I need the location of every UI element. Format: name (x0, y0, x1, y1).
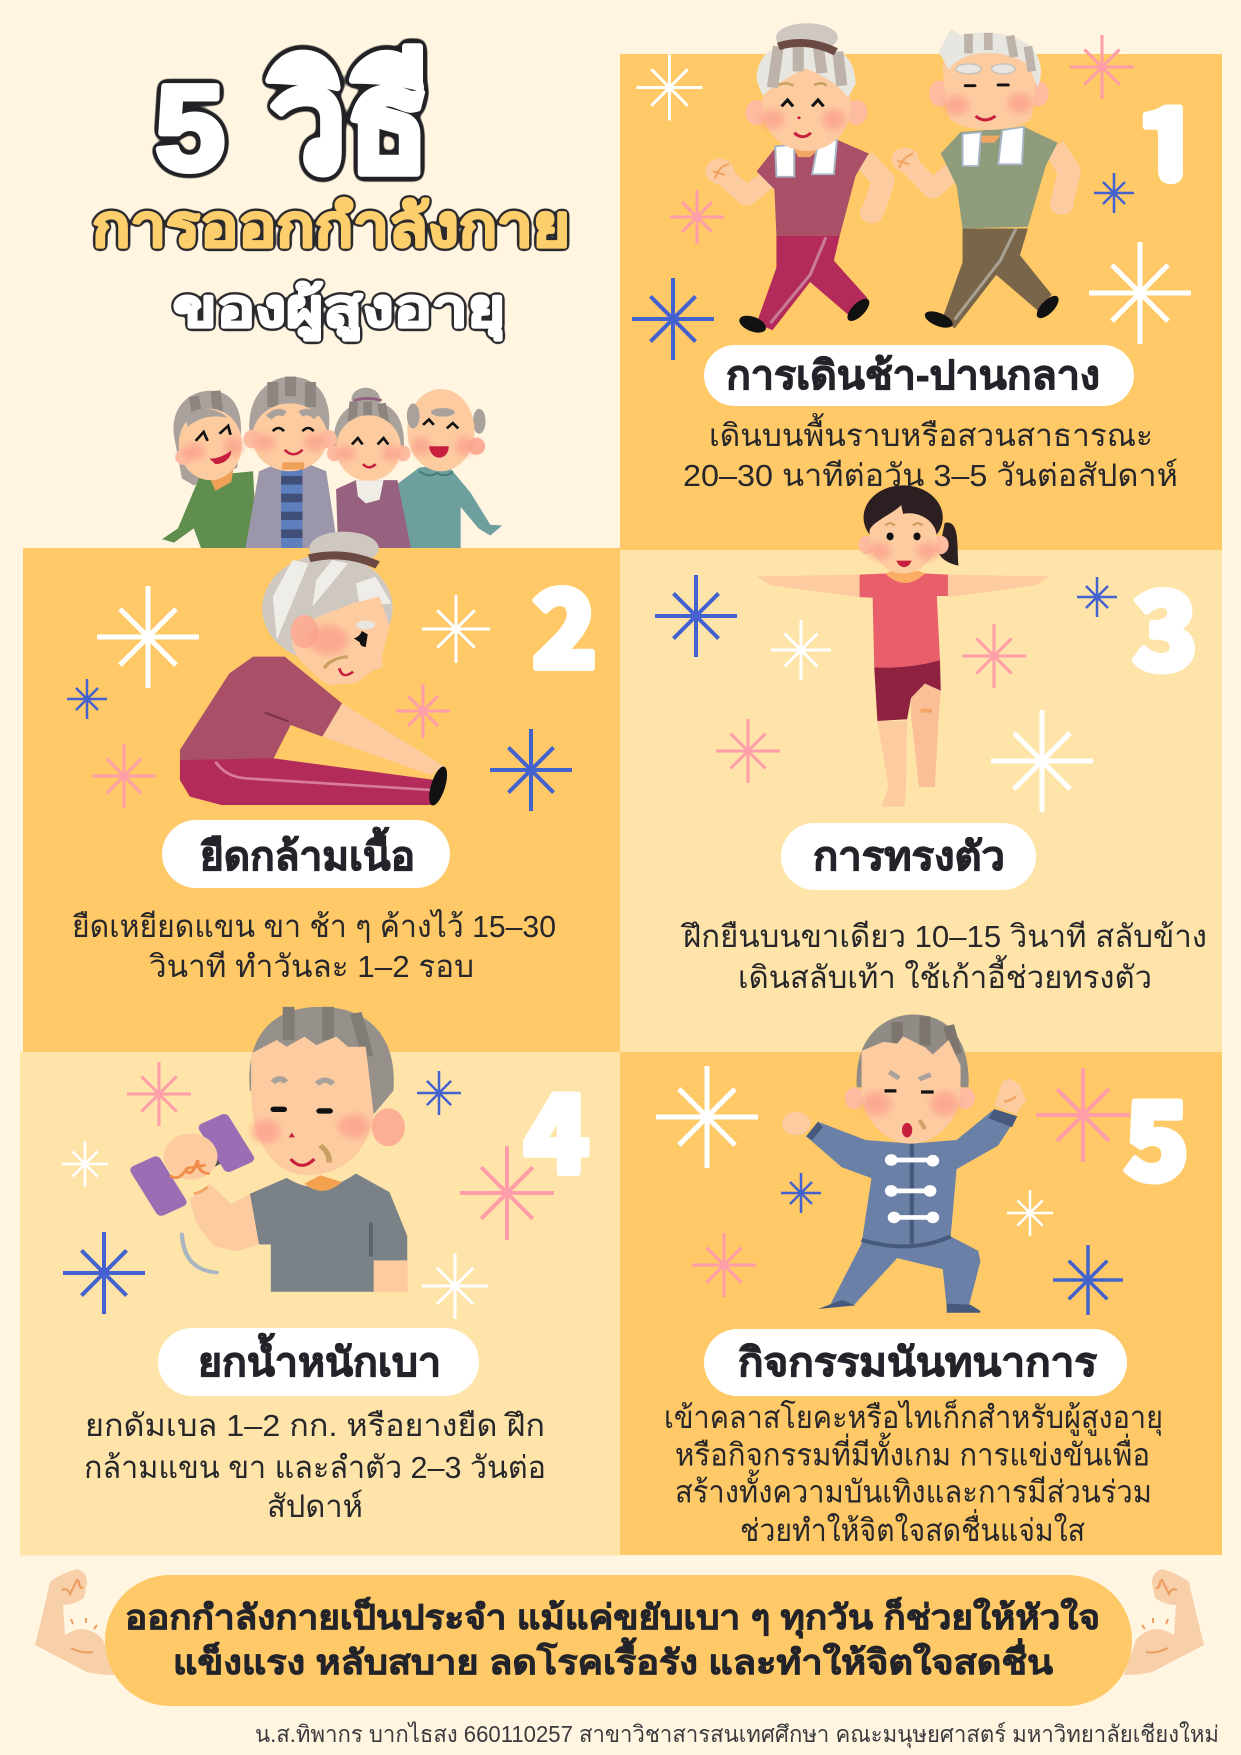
icon: left flexed arm (35, 1569, 115, 1675)
description 1 (683, 413, 1178, 493)
sparkles panel 1 (632, 35, 1191, 360)
subtitle: ของผู้สูงอายุ: ของผู้สูงอายุ (173, 280, 505, 341)
senior: bald man in teal (395, 389, 502, 550)
description 5: หรือกิจกรรมที่มีทั้งเกม การแข่งขันเพื่อ (675, 1432, 1150, 1472)
pill heading 1 (704, 345, 1134, 406)
title: 5 วิธี: 5 (155, 60, 225, 196)
description 3: ฝึกยืนบนขาเดียว 10–15 วินาที สลับข้าง (680, 919, 1207, 954)
footer credit: น.ส.ทิพากร บากไธสง 660110257 สาขาวิชาสารสนเทศศึกษา คณะมนุษยศาสตร์ มหาวิทยาลัยเชียงใหม่ (255, 1721, 1219, 1748)
panel 3: balance (620, 485, 1222, 1052)
description 1: เดินบนพื้นราบหรือสวนสาธารณะ (709, 413, 1153, 453)
description 4 (84, 1408, 546, 1524)
subtitle: การออกกำลังกาย: การออกกำลังกาย (92, 194, 570, 259)
illustration: four smiling seniors (162, 377, 502, 550)
sparkles panel 4 (62, 1062, 554, 1319)
number 4: 4 (524, 1049, 589, 1205)
sparkles panel 5 (656, 1066, 1130, 1315)
panel 1: walking (620, 23, 1222, 550)
pill heading 4: ยกน้ำหนักเบา (198, 1333, 441, 1385)
panel 4: light weights (20, 1007, 620, 1556)
illustration: man lifting dumbbell (128, 1007, 408, 1292)
pill heading 2: ยืดกล้ามเนื้อ (200, 827, 415, 879)
description 3: เดินสลับเท้า ใช้เก้าอี้ช่วยทรงตัว (738, 955, 1152, 995)
number 3: 3 (1132, 546, 1198, 702)
illustration: woman stretching forward (180, 532, 451, 807)
illustration: walking couple (706, 23, 1073, 336)
title: 5 วิธี (155, 42, 430, 202)
description 4: สัปดาห์ (267, 1489, 363, 1524)
pill heading 1: การเดินช้า-ปานกลาง (726, 354, 1100, 398)
illustration: man doing tai chi (782, 1015, 1026, 1313)
senior: woman in green (162, 391, 257, 550)
description 4: กล้ามแขน ขา และลำตัว 2–3 วันต่อ (84, 1450, 546, 1485)
description 2 (72, 909, 556, 984)
number 2: 2 (532, 544, 597, 700)
walking man (892, 29, 1073, 331)
senior: woman in purple (327, 388, 411, 550)
pill heading 5 (704, 1329, 1127, 1396)
panel 5: recreation (620, 1015, 1222, 1555)
description 4: ยกดัมเบล 1–2 กก. หรือยางยืด ฝึก (85, 1408, 545, 1443)
description 3 (680, 919, 1207, 995)
pill heading 2 (162, 820, 450, 888)
callout: closing message (105, 1575, 1132, 1706)
illustration: girl balancing on one leg (757, 485, 1050, 807)
sparkles panel 3 (655, 575, 1117, 812)
pill heading 5: กิจกรรมนันทนาการ (738, 1341, 1098, 1385)
pill heading 3 (781, 823, 1036, 890)
description 2: วินาที ทำวันละ 1–2 รอบ (148, 949, 474, 984)
description 5: สร้างทั้งความบันเทิงและการมีส่วนร่วม (675, 1470, 1152, 1510)
title: 5 วิธี: วิธี (268, 42, 430, 202)
walking woman (706, 23, 884, 336)
description 5: เข้าคลาสโยคะหรือไทเก็กสำหรับผู้สูงอายุ (664, 1399, 1163, 1437)
panel 2: muscle stretching (23, 532, 620, 1052)
description 2: ยืดเหยียดแขน ขา ช้า ๆ ค้างไว้ 15–30 (72, 909, 556, 944)
callout: closing message: แข็งแรง หลับสบาย ลดโรคเรื้อรัง และทำให้จิตใจสดชื่น (173, 1637, 1053, 1682)
sparkles panel 2 (67, 586, 572, 811)
icon: right flexed arm (1124, 1569, 1204, 1675)
description 5: ช่วยทำให้จิตใจสดชื่นแจ่มใส (740, 1509, 1085, 1548)
pill heading 4 (158, 1328, 479, 1396)
description 1: 20–30 นาทีต่อวัน 3–5 วันต่อสัปดาห์ (683, 458, 1178, 493)
pill heading 3: การทรงตัว (813, 835, 1005, 879)
number 1: 1 (1135, 62, 1201, 218)
senior: man in cardigan (244, 377, 338, 550)
callout: closing message: ออกกำลังกายเป็นประจำ แม้แค่ขยับเบา ๆ ทุกวัน ก็ช่วยให้หัวใจ (125, 1596, 1100, 1639)
description 5 (664, 1399, 1163, 1548)
number 5: 5 (1124, 1056, 1189, 1212)
